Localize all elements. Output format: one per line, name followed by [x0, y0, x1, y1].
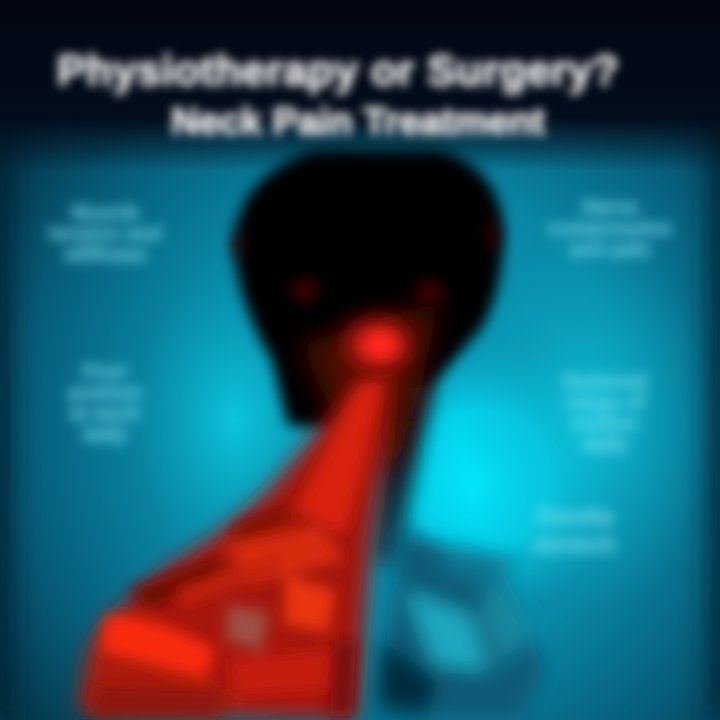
- title: Neck Pain Treatment: [171, 101, 545, 143]
- callout: lower right: stretch: [533, 531, 617, 559]
- callout: middle left: [63, 358, 146, 449]
- title: [51, 46, 624, 143]
- callout: middle left: daily: [82, 424, 128, 446]
- callout: top left: tension and: [49, 223, 161, 245]
- callout: middle right: Reduced: [563, 371, 647, 393]
- callout: middle left: posture: [68, 382, 142, 404]
- title: Physiotherapy or Surgery?: [57, 47, 619, 95]
- callout: middle right: daily: [582, 434, 628, 456]
- callout: middle right: range of: [566, 392, 644, 414]
- callout: lower right: [529, 502, 621, 560]
- dim red inside head: [300, 300, 440, 470]
- callout: top right: and pain: [569, 239, 651, 261]
- top title band: [0, 0, 720, 172]
- neck and shoulder in red: [78, 372, 392, 720]
- callout: middle right: [558, 368, 652, 459]
- callout: top left: stiffness: [64, 244, 146, 266]
- callout: top left: [43, 198, 166, 268]
- callout: middle left: Poor: [82, 361, 128, 383]
- head silhouette: [234, 150, 504, 430]
- callout: top left: Muscle: [71, 202, 139, 224]
- callout: middle left: at work: [70, 403, 140, 425]
- pain point: [234, 221, 497, 373]
- cyan glow: [135, 230, 720, 620]
- callout: middle right: motion: [572, 413, 638, 435]
- neck shadow behind the throat: [372, 380, 432, 570]
- muscle highlights: [88, 380, 382, 716]
- callout: lower right: Gentle: [536, 503, 614, 531]
- callout: top right: compression: [548, 218, 672, 240]
- callout: top right: [544, 194, 676, 264]
- lower right torso: [375, 530, 545, 720]
- callout: top right: Nerve: [582, 197, 638, 219]
